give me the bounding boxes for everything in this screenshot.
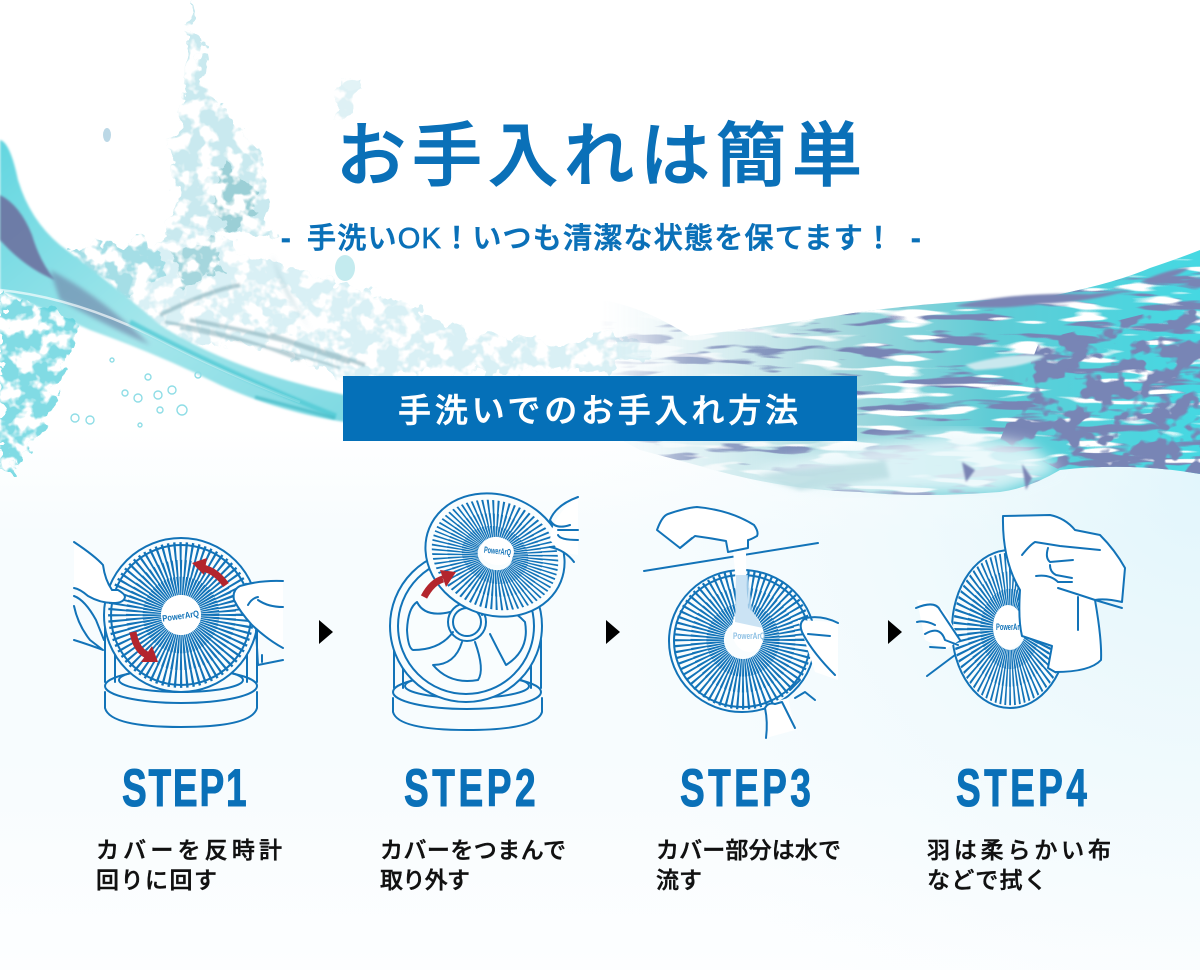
- step 4 label: 羽は柔らかい布: [927, 837, 1111, 863]
- left foam: [0, 290, 80, 470]
- water droplets: [103, 80, 361, 281]
- towel and hand: [1003, 515, 1125, 672]
- hand: bottom: [765, 680, 815, 738]
- step 3 label: [656, 758, 841, 893]
- step 2 label: [380, 758, 566, 893]
- right water band: [500, 250, 1200, 495]
- step 4 label: STEP4: [956, 758, 1087, 818]
- sink line: [644, 543, 818, 571]
- illustration: step 4 wiping: [916, 515, 1125, 708]
- section banner: 手洗いでのお手入れ方法: [398, 392, 798, 429]
- step 4 label: などで拭く: [927, 867, 1047, 893]
- step 4 label: [927, 758, 1111, 893]
- arrow: [424, 570, 456, 597]
- fan base: [393, 640, 542, 730]
- purple streaks: [955, 268, 1190, 490]
- water stream: [732, 550, 765, 652]
- step 3 label: STEP3: [680, 758, 811, 818]
- cover: [952, 550, 1068, 708]
- subtitle: 手洗いOK！いつも清潔な状態を保てます！: [307, 222, 893, 255]
- section banner: [343, 376, 857, 441]
- hand: right: [798, 617, 838, 680]
- step 3 label: 流す: [656, 867, 702, 893]
- illustration: step 3 rinsing: [644, 507, 838, 738]
- arrow: top: [192, 558, 226, 585]
- hand: left: [916, 600, 960, 676]
- arrow: step 2 to 3: [606, 620, 620, 644]
- illustration: step 2 fan: [390, 473, 583, 730]
- fan grill: [104, 538, 258, 692]
- hand: right: [234, 581, 283, 665]
- detached cover: PowerArQ: [484, 545, 511, 557]
- fan base: [105, 600, 257, 727]
- step 1 label: [96, 758, 282, 893]
- left crest: [0, 140, 345, 422]
- step 2 label: カバーをつまんで: [380, 837, 566, 863]
- water stream: PowerArQ: [733, 631, 765, 641]
- pale pool: [965, 355, 1045, 370]
- cover: PowerArQ: [996, 622, 1024, 632]
- purple-rich right side: [1000, 300, 1200, 474]
- fan body with blades: [390, 550, 542, 702]
- subtitle: -: [281, 223, 291, 255]
- illustration: step 1 fan: [74, 538, 283, 727]
- fan grill: PowerArQ: [162, 609, 200, 624]
- detached cover: [407, 473, 583, 637]
- arrow: bottom: [133, 632, 158, 662]
- subtitle: -: [911, 223, 921, 255]
- grey streak fan: [160, 285, 365, 368]
- hand: left: [74, 542, 125, 650]
- water splash image: [0, 0, 1200, 495]
- arrow: step 1 to 2: [319, 620, 333, 644]
- step 2 label: STEP2: [404, 758, 536, 818]
- fade out of water into the background: [750, 432, 1060, 492]
- step 1 label: 回りに回す: [96, 867, 217, 893]
- splash tower: [160, 0, 358, 245]
- step 1 label: STEP1: [122, 758, 247, 818]
- cover under water: [669, 570, 815, 712]
- hand: [550, 497, 578, 562]
- faucet: [657, 507, 758, 552]
- title: お手入れは簡単: [336, 117, 862, 195]
- step 1 label: カバーを反時計: [96, 837, 282, 863]
- step 3 label: カバー部分は水で: [656, 837, 841, 863]
- arrow: step 3 to 4: [888, 620, 902, 644]
- pale central wave: [60, 225, 660, 380]
- bubbles: [71, 358, 201, 427]
- step 2 label: 取り外す: [380, 867, 470, 893]
